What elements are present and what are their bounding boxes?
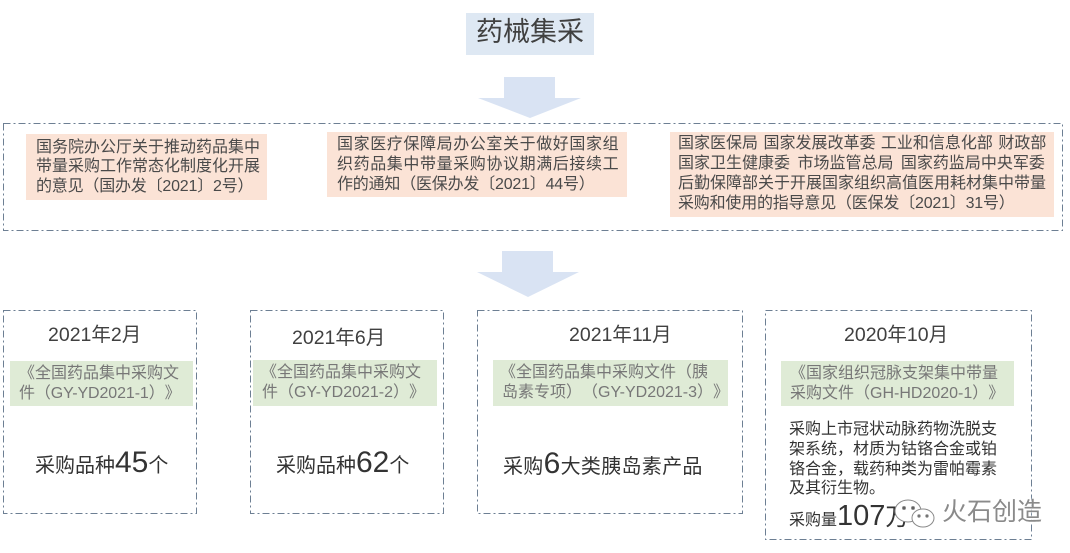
card 1 document bbox=[10, 361, 193, 406]
card 1 document: 件（GY-YD2021-1）》 bbox=[19, 384, 181, 402]
card 1 date: 2021年2月 bbox=[48, 324, 141, 346]
card 3 date: 2021年11月 bbox=[569, 324, 672, 346]
policy 3: 国家卫生健康委 市场监管总局 国家药监局中央军委 bbox=[678, 155, 1045, 172]
card 4 description: 铬合金，载药种类为雷帕霉素 bbox=[789, 461, 997, 478]
card 2 quantity: 采购品种62个 bbox=[276, 446, 409, 479]
card 4 description bbox=[789, 420, 997, 497]
card 4 date: 2020年10月 bbox=[844, 324, 948, 346]
card 2 document: 件（GY-YD2021-2）》 bbox=[262, 384, 425, 400]
card 4 document: 采购文件（GH-HD2020-1）》 bbox=[790, 384, 1004, 402]
watermark icon bbox=[894, 500, 934, 528]
card 2 document bbox=[253, 360, 437, 406]
card 1 document: 《全国药品集中采购文 bbox=[19, 365, 179, 382]
policy 1: 国务院办公厅关于推动药品集中 bbox=[36, 138, 260, 156]
card 2 date: 2021年6月 bbox=[292, 327, 385, 349]
card 4 document: 《国家组织冠脉支架集中带量 bbox=[790, 365, 998, 382]
policy 1 bbox=[26, 134, 267, 200]
policy 3: 国家医保局 国家发展改革委 工业和信息化部 财政部 bbox=[678, 135, 1046, 152]
policy 2: 国家医疗保障局办公室关于做好国家组 bbox=[337, 136, 619, 153]
card 3 quantity: 采购6大类胰岛素产品 bbox=[503, 447, 703, 480]
policy 2: 织药品集中带量采购协议期满后接续工 bbox=[337, 156, 619, 173]
card 3 document: 岛素专项）（GY-YD2021-3）》 bbox=[502, 384, 729, 400]
card 4 description: 采购上市冠状动脉药物洗脱支 bbox=[789, 421, 997, 438]
policy 2 bbox=[327, 132, 627, 197]
policy 3 bbox=[670, 132, 1054, 217]
policy 1: 的意见（国办发〔2021〕2号） bbox=[36, 178, 253, 194]
card 1 quantity: 采购品种45个 bbox=[35, 446, 168, 479]
title: 药械集采 bbox=[476, 17, 584, 47]
card 4 description: 架系统，材质为钴铬合金或铂 bbox=[789, 441, 997, 458]
card 3 document bbox=[493, 360, 728, 406]
card 4 document bbox=[781, 361, 1014, 406]
policy 3: 后勤保障部关于开展国家组织高值医用耗材集中带量 bbox=[678, 175, 1046, 192]
card 4 quantity: 采购量107万 bbox=[789, 500, 909, 532]
policy 3: 采购和使用的指导意见（医保发〔2021〕31号） bbox=[678, 195, 1015, 212]
card 4 description: 及其衍生物。 bbox=[789, 480, 885, 497]
policy 1: 带量采购工作常态化制度化开展 bbox=[36, 158, 260, 175]
watermark: 火石创造 bbox=[942, 498, 1042, 526]
card 3 document: 《全国药品集中采购文件（胰 bbox=[500, 364, 708, 381]
policy 2: 作的通知（医保办发〔2021〕44号） bbox=[337, 176, 595, 193]
title bbox=[466, 13, 594, 55]
card 2 document: 《全国药品集中采购文 bbox=[261, 364, 421, 381]
